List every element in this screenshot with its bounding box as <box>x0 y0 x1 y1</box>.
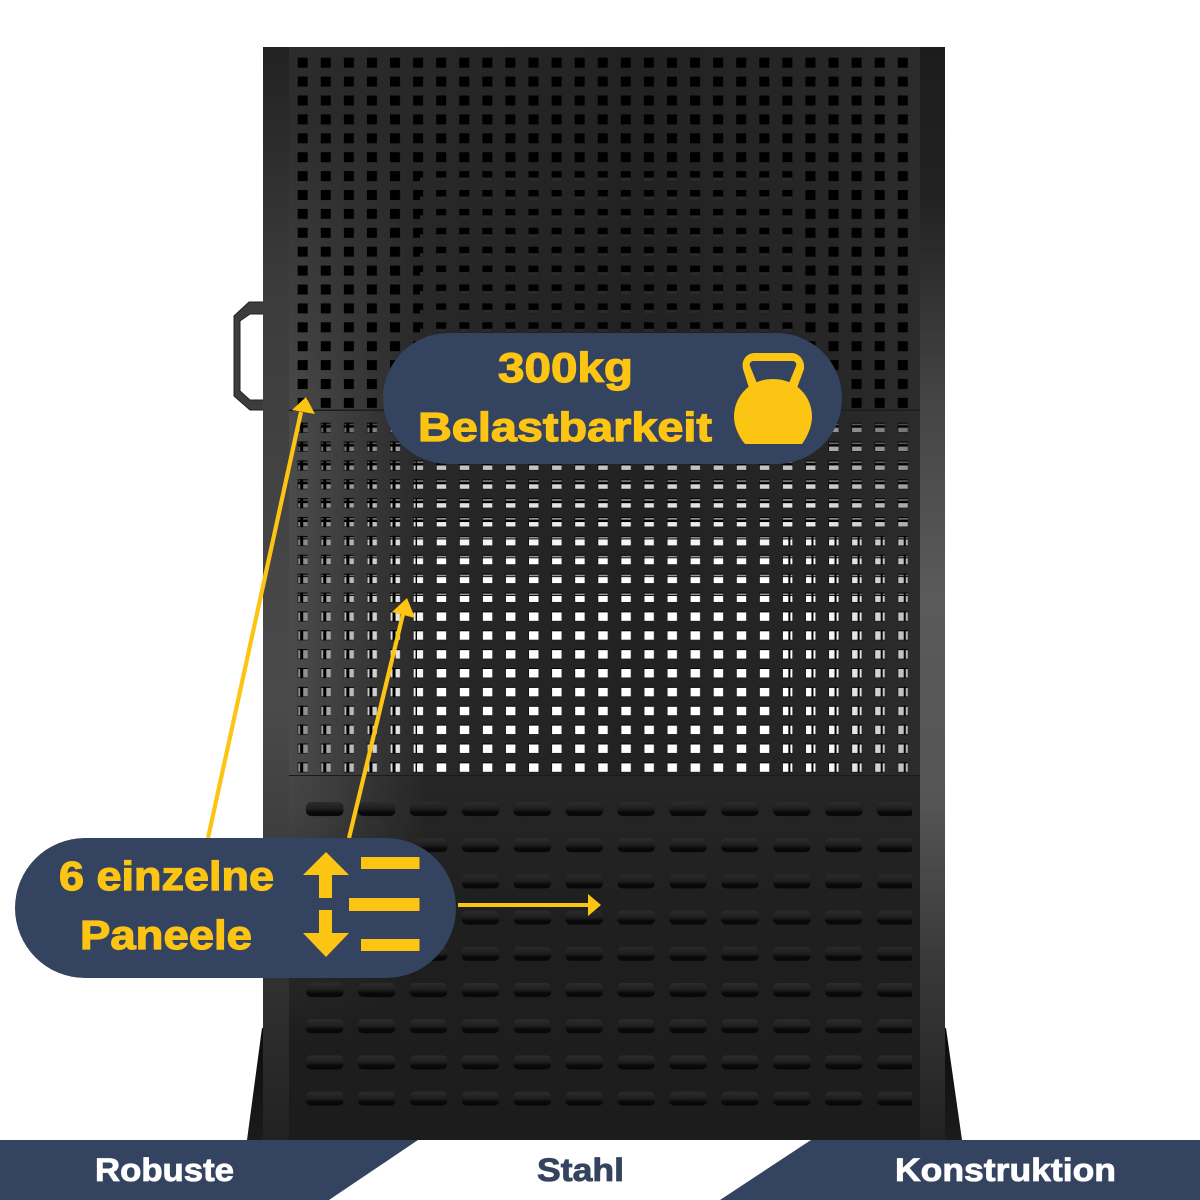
stand foot right <box>930 1028 962 1140</box>
heading: 300kg: 300kg <box>498 344 633 391</box>
lower perforation holes <box>297 422 909 773</box>
text: Konstruktion: Konstruktion <box>895 1152 1116 1188</box>
left side post <box>263 47 289 1140</box>
handle <box>234 302 264 410</box>
louver slots <box>306 802 912 1114</box>
stand foot left <box>247 1028 275 1140</box>
arrow: to louver panel <box>458 894 601 916</box>
icon: kettlebell <box>734 353 812 444</box>
upper perforation holes <box>297 57 909 409</box>
text: 6 einzelne: 6 einzelne <box>59 853 274 899</box>
light through holes <box>297 422 909 773</box>
icon: adjustable panels <box>303 852 420 957</box>
banner: bottom strip <box>0 1140 1200 1200</box>
arrow: to middle panel <box>349 598 415 838</box>
callout: six individual panels <box>15 838 456 978</box>
perforated panels <box>289 47 920 776</box>
banner left segment <box>0 1140 418 1200</box>
louvered bottom panel <box>289 775 920 1140</box>
callout: load capacity <box>383 333 842 464</box>
product: steel pegboard rack <box>234 47 962 1140</box>
arrow: to upper panel <box>208 397 315 838</box>
banner right segment <box>720 1140 1200 1200</box>
right side post <box>920 47 945 1140</box>
text: Stahl: Stahl <box>537 1152 624 1188</box>
text: Paneele: Paneele <box>80 912 252 958</box>
text: Belastbarkeit: Belastbarkeit <box>418 404 712 450</box>
text: Robuste: Robuste <box>95 1152 234 1188</box>
